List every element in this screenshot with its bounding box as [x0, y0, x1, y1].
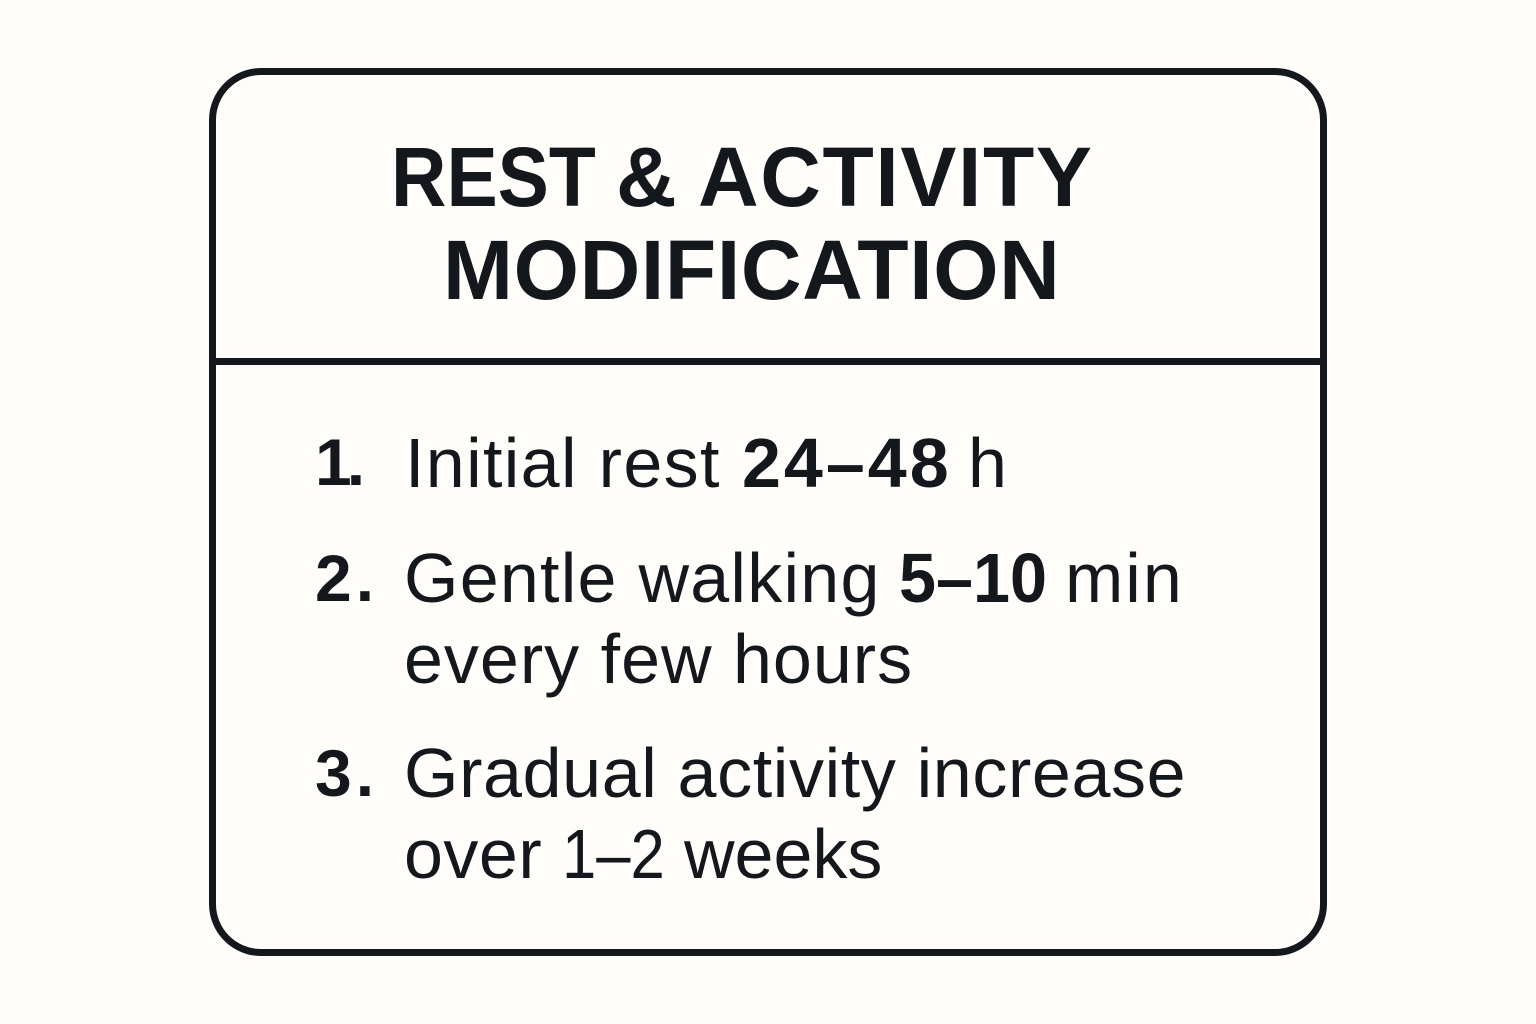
heading: REST — [391, 130, 596, 224]
step 1: h — [968, 424, 1007, 502]
step 2: Gentle walking — [404, 539, 881, 617]
step 3: 1–2 — [562, 815, 665, 893]
step 2 — [315, 539, 1184, 698]
heading: ACTIVITY — [698, 130, 1093, 224]
step 3: weeks — [684, 815, 882, 893]
step 2: 2. — [315, 541, 378, 615]
step 3 — [315, 734, 1186, 893]
step 2: min — [1065, 539, 1184, 617]
step 2: every few hours — [404, 620, 913, 698]
divider line — [213, 358, 1323, 365]
step 1: 24–48 — [742, 424, 952, 502]
step 3: over — [404, 815, 542, 893]
panel: rest and activity card — [209, 68, 1327, 956]
step 1: Initial rest — [405, 424, 721, 502]
step 3: 3. — [315, 736, 378, 810]
heading: & — [616, 130, 677, 224]
step 3: Gradual activity increase — [404, 734, 1186, 812]
heading: MODIFICATION — [443, 223, 1060, 317]
step 1 — [315, 424, 1007, 502]
step 1: 1. — [315, 425, 360, 499]
heading — [391, 130, 1093, 317]
step 2: 5–10 — [899, 539, 1047, 617]
